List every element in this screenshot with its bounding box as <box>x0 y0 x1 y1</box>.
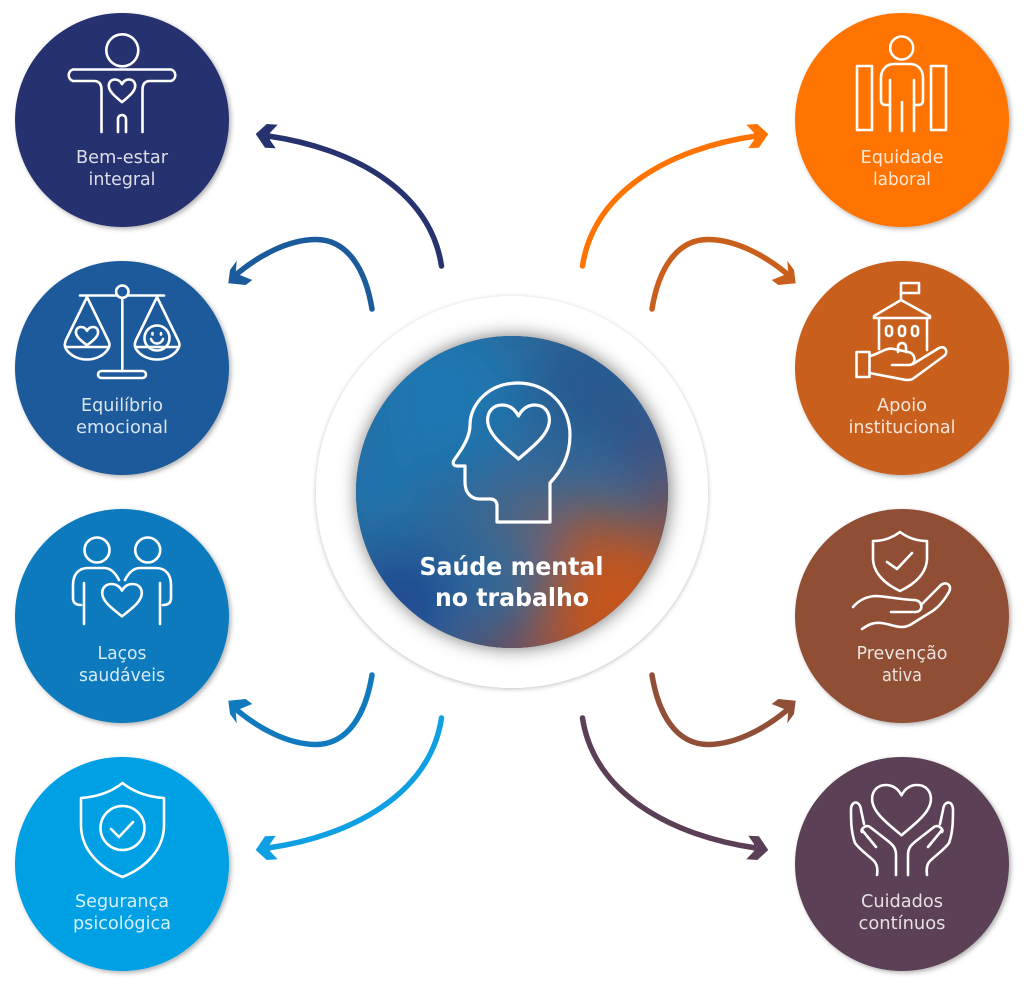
arrow: to Bem-estar integral <box>256 124 442 266</box>
label: Apoio institucional: Apoio <box>877 396 927 416</box>
arrow: to Laços saudáveis <box>228 675 372 745</box>
label: Cuidados contínuos: Cuidados <box>861 892 943 912</box>
label: Prevenção ativa: Prevenção <box>856 644 948 664</box>
arrow: to Cuidados contínuos <box>582 718 768 860</box>
label: Bem-estar integral: integral <box>88 170 156 190</box>
label: Segurança psicológica: psicológica <box>73 914 171 934</box>
label: Equilíbrio emocional: Equilíbrio <box>81 396 163 416</box>
label: Equidade laboral: laboral <box>873 170 931 190</box>
label: Segurança psicológica <box>73 892 171 934</box>
icon: building on hand <box>856 283 946 380</box>
arrow: to Equilíbrio emocional <box>228 239 372 309</box>
label: Bem-estar integral: Bem-estar <box>76 148 169 168</box>
central hub: Saúde mental no trabalho <box>316 296 719 703</box>
label: Apoio institucional: institucional <box>848 418 956 438</box>
label: Prevenção ativa: ativa <box>882 666 922 686</box>
arrow: to Prevenção ativa <box>652 675 796 745</box>
panel: Cuidados contínuos <box>795 757 1009 971</box>
label: Cuidados contínuos: contínuos <box>858 914 946 934</box>
title <box>420 552 604 612</box>
label: Cuidados contínuos <box>858 892 946 934</box>
label: Laços saudáveis <box>79 644 165 686</box>
icon: two people and heart <box>73 538 171 624</box>
label: Equilíbrio emocional: emocional <box>76 418 168 438</box>
panel: Equilíbrio emocional <box>15 261 229 475</box>
panel: Equidade laboral <box>795 13 1009 227</box>
arrow: to Apoio institucional <box>652 239 796 309</box>
arrow: to Segurança psicológica <box>256 718 442 860</box>
panel: Apoio institucional <box>795 261 1009 475</box>
icon: shield over hand <box>853 532 950 629</box>
icon: hands holding heart <box>851 785 953 875</box>
panel: Laços saudáveis <box>15 509 229 723</box>
icon: person between bars <box>857 36 946 131</box>
panel: Segurança psicológica <box>15 757 229 971</box>
label: Equilíbrio emocional <box>76 396 168 438</box>
icon: head with heart <box>453 383 570 522</box>
label: Laços saudáveis: saudáveis <box>79 666 165 686</box>
title: no trabalho <box>435 583 589 612</box>
panel: Prevenção ativa <box>795 509 1009 723</box>
panel: Bem-estar integral <box>15 13 229 227</box>
label: Segurança psicológica: Segurança <box>75 892 169 912</box>
label: Laços saudáveis: Laços <box>98 644 146 664</box>
label: Equidade laboral <box>860 148 944 190</box>
label: Bem-estar integral <box>76 148 169 190</box>
label: Equidade laboral: Equidade <box>860 148 944 168</box>
label: Apoio institucional <box>848 396 956 438</box>
icon: balance scale <box>65 286 180 378</box>
icon: person with heart <box>69 34 175 132</box>
title: Saúde mental <box>420 552 604 581</box>
icon: shield with check <box>81 783 164 877</box>
label: Prevenção ativa <box>856 644 948 686</box>
arrow: to Equidade laboral <box>582 124 768 266</box>
